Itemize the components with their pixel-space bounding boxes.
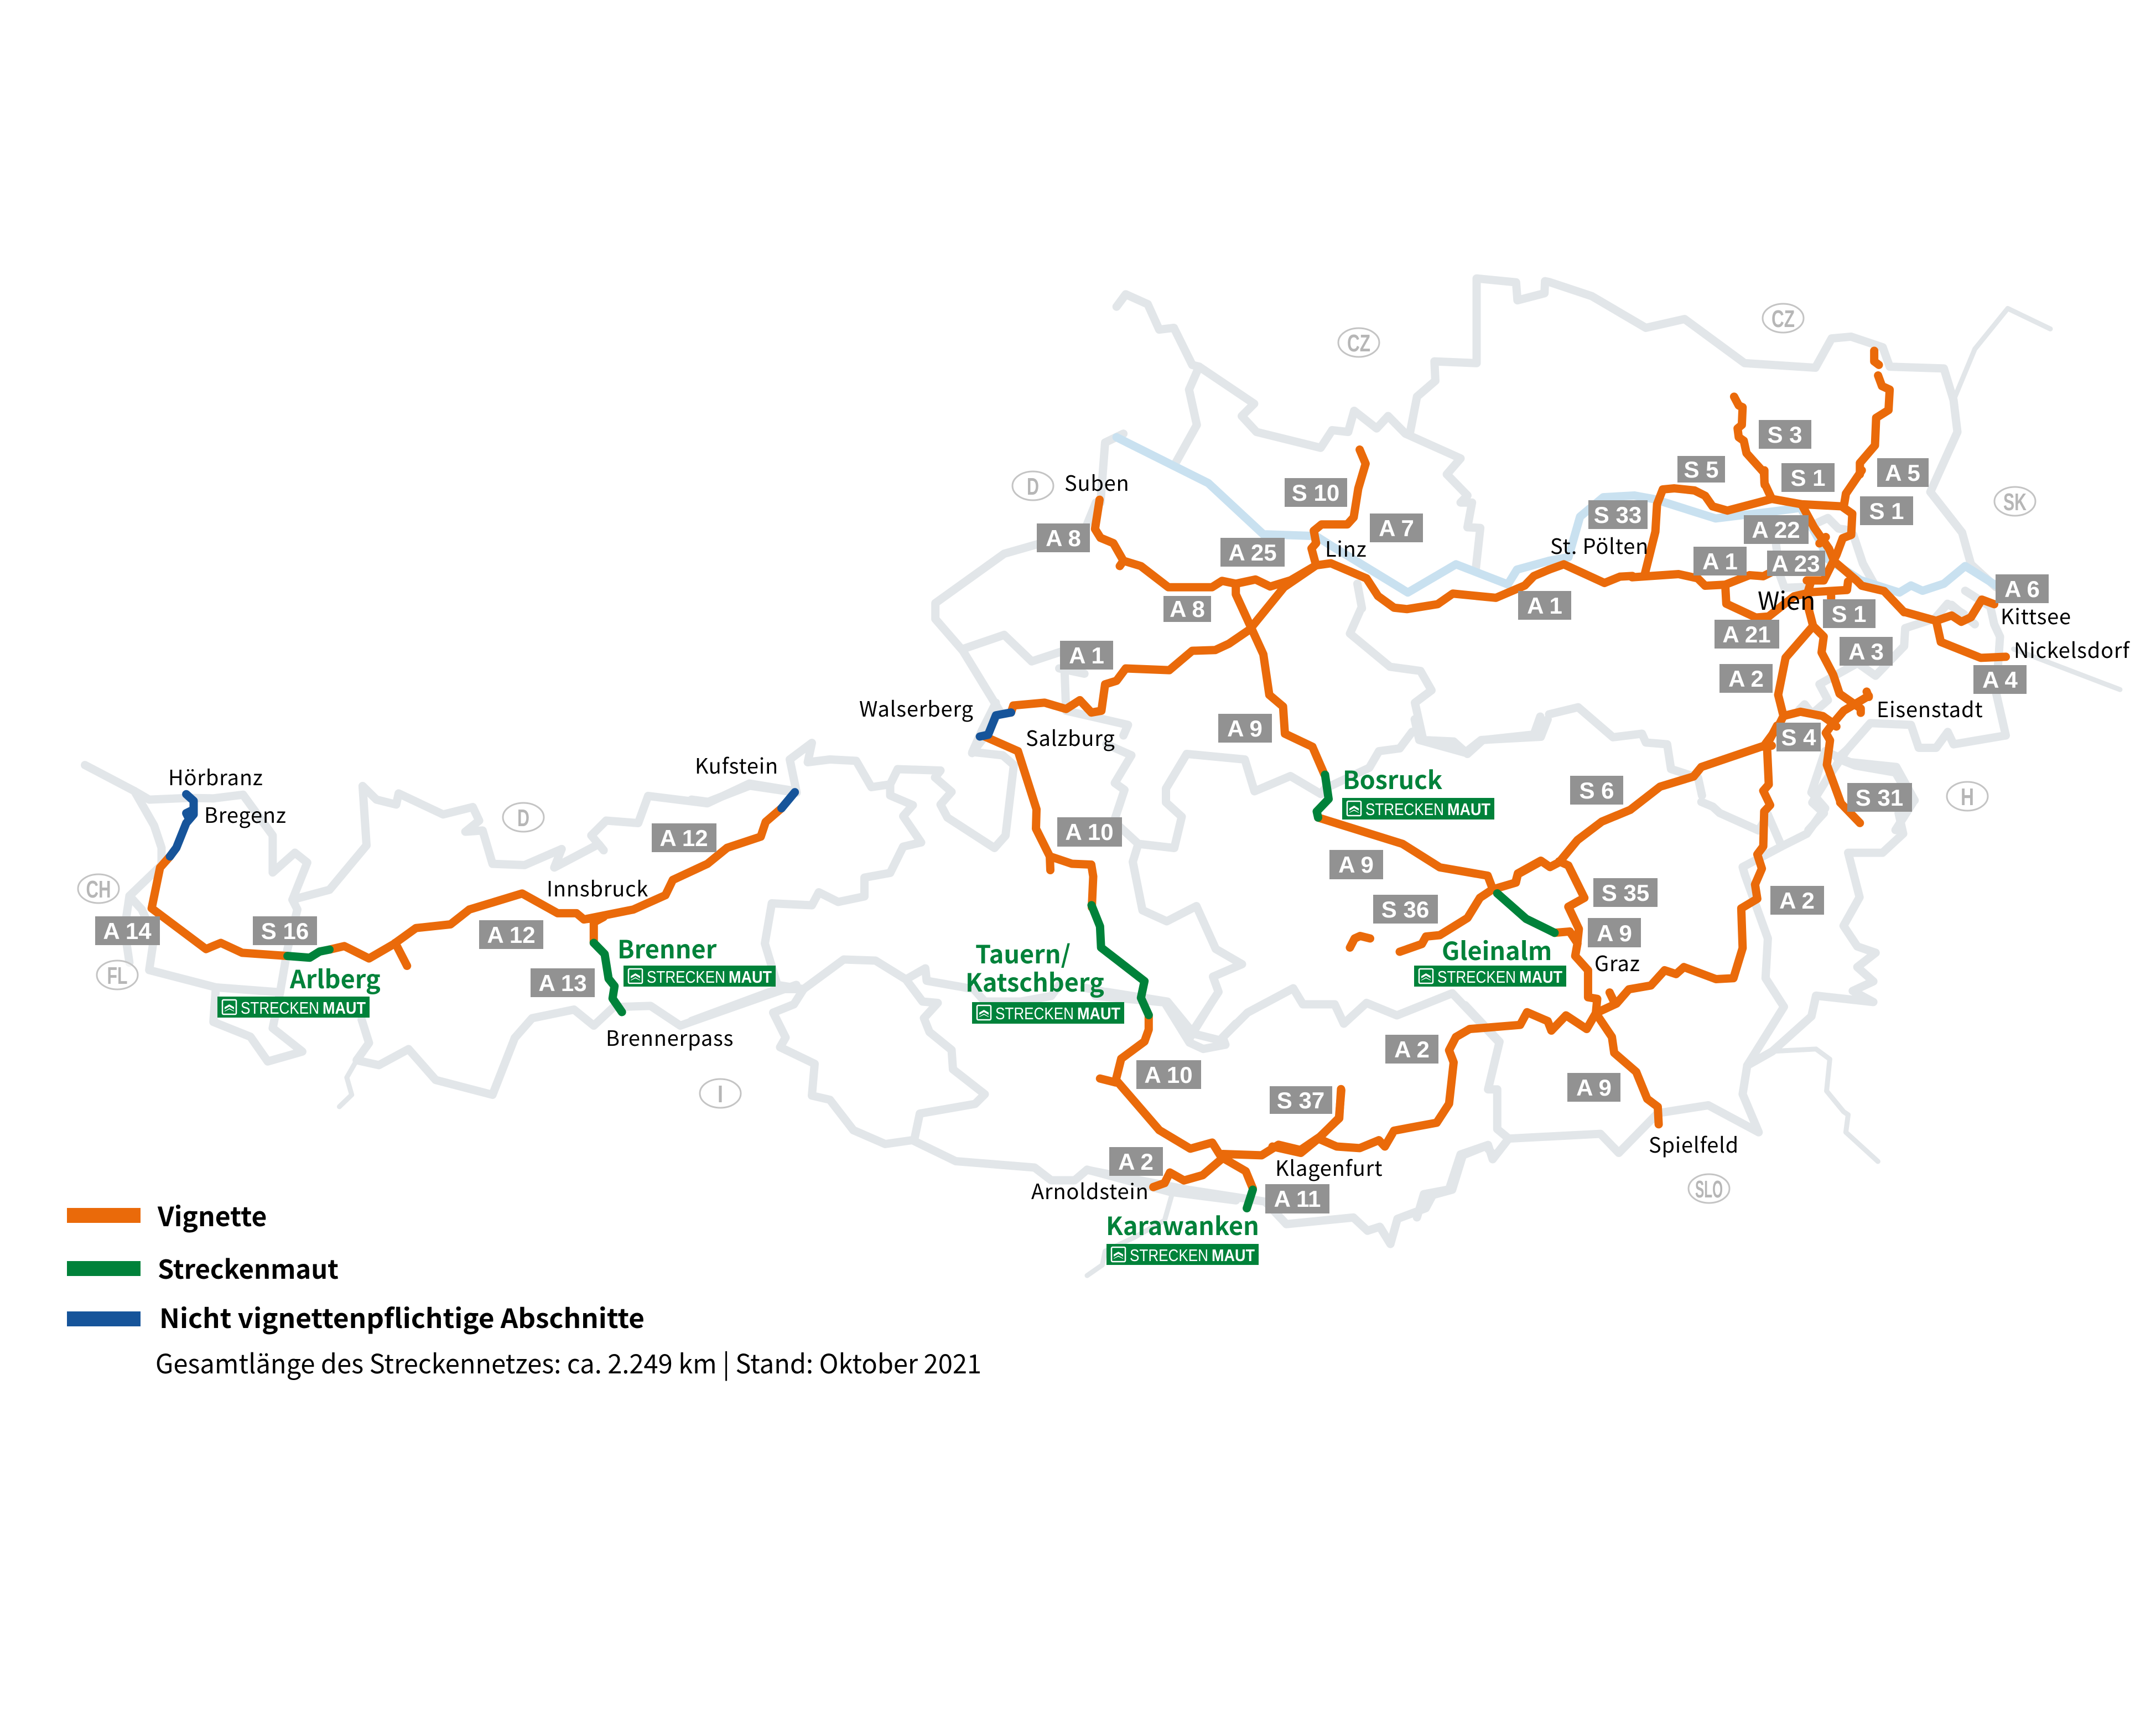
label S 36 xyxy=(1373,895,1438,924)
label A 1 Wien xyxy=(1693,547,1747,575)
label A 2 Arnoldstein: A 2 xyxy=(1118,1149,1154,1175)
label A 10 south: A 10 xyxy=(1144,1062,1193,1088)
Bosruck road xyxy=(1317,775,1329,818)
label A 12 west: A 12 xyxy=(487,922,536,948)
Vienna network xyxy=(1632,470,1904,802)
label A 9 Gleisdorf xyxy=(1329,850,1383,879)
A14 S16 A12 west xyxy=(152,808,782,966)
green section toll roads xyxy=(288,775,1555,1208)
badge Karawanken: MAUT xyxy=(1212,1246,1255,1265)
marker I: I xyxy=(718,1081,723,1108)
name Brenner: Brenner xyxy=(617,930,717,966)
city Arnoldstein: Arnoldstein xyxy=(1031,1175,1149,1205)
badge Gleinalm xyxy=(1414,966,1566,987)
label A 8 north: A 8 xyxy=(1046,525,1081,551)
badge Arlberg: STRECKEN xyxy=(241,998,319,1018)
label S 1 south xyxy=(1823,599,1876,628)
Walserberg section xyxy=(980,713,1011,736)
label S 6: S 6 xyxy=(1579,777,1614,803)
legend Streckenmaut: Streckenmaut xyxy=(158,1248,339,1287)
label A 5 xyxy=(1877,458,1929,487)
label S 35 xyxy=(1593,878,1658,907)
label A 4 xyxy=(1973,665,2027,694)
legend nicht vignettenpflichtig: Nicht vignettenpflichtige Abschnitte xyxy=(159,1297,645,1336)
total length note: Gesamtlänge des Streckennetzes: ca. 2.249 km | Stand: Oktober 2021 xyxy=(155,1342,981,1381)
label A 14 xyxy=(95,916,160,945)
city Kufstein: Kufstein xyxy=(695,749,778,780)
label A 12 west xyxy=(479,920,543,949)
name Tauern Katschberg: Tauern/ xyxy=(975,935,1071,971)
badge Gleinalm: STRECKEN xyxy=(1437,967,1516,987)
badge Tauern Katschberg: MAUT xyxy=(1077,1004,1120,1023)
label A 2 east xyxy=(1770,886,1824,915)
city Linz: Linz xyxy=(1325,532,1367,563)
marker SK: SK xyxy=(2003,489,2027,516)
label A 8 south: A 8 xyxy=(1170,596,1205,622)
label A 1 centre: A 1 xyxy=(1527,593,1562,619)
label A 1 Salzburg: A 1 xyxy=(1069,642,1104,668)
name Tauern Katschberg xyxy=(965,935,1104,999)
label A 1 Salzburg xyxy=(1060,641,1113,670)
marker H xyxy=(1947,782,1988,811)
label A 23: A 23 xyxy=(1771,551,1820,577)
label A 11 xyxy=(1265,1184,1329,1213)
blue non-vignette sections xyxy=(170,713,1011,857)
badge Karawanken: STRECKEN xyxy=(1130,1246,1208,1265)
label A 1 Wien: A 1 xyxy=(1702,548,1738,574)
name Bosruck: Bosruck xyxy=(1343,760,1442,796)
label A 2 Arnoldstein xyxy=(1109,1147,1163,1176)
label S 6 xyxy=(1570,776,1623,805)
Karawanken road xyxy=(1247,1190,1253,1208)
label S 33: S 33 xyxy=(1594,502,1641,528)
city Klagenfurt: Klagenfurt xyxy=(1275,1152,1383,1182)
city Suben: Suben xyxy=(1064,466,1129,497)
label A 6 xyxy=(1996,574,2049,603)
badge Arlberg xyxy=(217,997,370,1018)
label S 3: S 3 xyxy=(1767,422,1802,448)
marker D east xyxy=(1012,471,1053,500)
label A 9 Pyhrn xyxy=(1218,714,1272,743)
label S 1 east xyxy=(1860,496,1913,525)
badge Gleinalm: MAUT xyxy=(1519,967,1562,987)
A10 Tauern north xyxy=(984,736,1093,907)
city Graz: Graz xyxy=(1594,947,1640,977)
S6 A2 A9 Styria xyxy=(1272,725,1777,1153)
label S 31: S 31 xyxy=(1856,785,1903,811)
badge Karawanken xyxy=(1106,1244,1259,1265)
marker I xyxy=(700,1079,741,1108)
toll section names xyxy=(289,760,1552,1242)
label A 9 Gleisdorf: A 9 xyxy=(1338,852,1374,878)
marker SLO: SLO xyxy=(1695,1176,1723,1203)
label A 10 north: A 10 xyxy=(1065,819,1114,845)
label A 10 south xyxy=(1136,1060,1201,1089)
legend Streckenmaut xyxy=(67,1248,339,1287)
city Spielfeld: Spielfeld xyxy=(1649,1128,1739,1159)
label A 1 centre xyxy=(1518,591,1571,620)
badge Bosruck: STRECKEN xyxy=(1365,800,1444,819)
label A 3 xyxy=(1840,637,1893,666)
name Arlberg: Arlberg xyxy=(289,959,381,995)
Kufstein section xyxy=(782,792,795,808)
label A 7: A 7 xyxy=(1379,515,1414,541)
label S 1 east: S 1 xyxy=(1869,498,1904,524)
city Walserberg: Walserberg xyxy=(859,692,974,723)
badge Bosruck: MAUT xyxy=(1447,800,1490,819)
label A 9 Pyhrn: A 9 xyxy=(1227,715,1263,741)
city Innsbruck: Innsbruck xyxy=(547,872,648,903)
legend Vignette xyxy=(67,1195,267,1234)
label A 21 xyxy=(1715,620,1779,649)
label A 25: A 25 xyxy=(1228,540,1277,566)
road number labels xyxy=(95,420,2049,1213)
label S 1 south: S 1 xyxy=(1831,601,1867,627)
Brenner road xyxy=(594,943,622,1012)
legend xyxy=(67,1195,981,1381)
A10 south and A2 Carinthia xyxy=(1100,1015,1341,1189)
badge Tauern Katschberg xyxy=(972,1002,1124,1024)
label S 1 north xyxy=(1781,463,1835,492)
label A 22: A 22 xyxy=(1752,517,1800,543)
label A 21: A 21 xyxy=(1722,621,1771,647)
label S 16 xyxy=(253,916,317,945)
badge Brenner: STRECKEN xyxy=(647,967,725,987)
badge Tauern Katschberg: STRECKEN xyxy=(995,1004,1074,1023)
label A 22 xyxy=(1744,515,1809,544)
city Wien: Wien xyxy=(1758,581,1815,617)
city St. Pölten: St. Pölten xyxy=(1550,530,1649,560)
label A 13: A 13 xyxy=(538,970,587,996)
marker D west xyxy=(503,803,544,832)
label A 14: A 14 xyxy=(103,918,152,944)
city Salzburg: Salzburg xyxy=(1026,722,1115,752)
marker D east: D xyxy=(1027,473,1039,500)
label A 11: A 11 xyxy=(1274,1186,1321,1212)
label S 10: S 10 xyxy=(1292,480,1339,506)
label S 31 xyxy=(1847,783,1912,812)
label A 9 Graz: A 9 xyxy=(1597,920,1632,946)
label A 2 Wien: A 2 xyxy=(1728,666,1764,692)
label A 25 xyxy=(1220,538,1285,567)
label A 5: A 5 xyxy=(1885,460,1920,486)
city Kittsee: Kittsee xyxy=(2001,600,2071,630)
marker FL: FL xyxy=(107,962,127,989)
badge Brenner xyxy=(624,966,776,987)
label S 1 north: S 1 xyxy=(1790,465,1826,491)
label A 9 Graz xyxy=(1588,918,1641,947)
river Danube xyxy=(1116,437,1996,593)
A9 central and S36 S6 xyxy=(1318,818,1540,952)
label A 2 east: A 2 xyxy=(1779,888,1815,914)
label A 8 north xyxy=(1037,523,1090,552)
marker D west: D xyxy=(517,805,529,832)
label A 12 east xyxy=(652,823,716,852)
label A 12 east: A 12 xyxy=(659,825,708,851)
orange vignette motorways xyxy=(152,351,2006,1189)
legend Vignette: Vignette xyxy=(157,1195,267,1234)
label S 37: S 37 xyxy=(1277,1087,1324,1113)
Hörbranz Bregenz section xyxy=(170,794,194,857)
label S 10 xyxy=(1285,478,1347,507)
label A 2 Wien xyxy=(1719,664,1773,693)
badge Bosruck xyxy=(1342,798,1494,819)
marker CZ west: CZ xyxy=(1347,330,1370,357)
badge Brenner: MAUT xyxy=(729,967,772,987)
label S 36: S 36 xyxy=(1381,896,1429,922)
name Karawanken: Karawanken xyxy=(1106,1206,1259,1242)
label A 4: A 4 xyxy=(1982,667,2018,693)
Gleinalm road xyxy=(1497,894,1555,933)
name Gleinalm: Gleinalm xyxy=(1442,931,1552,967)
city Eisenstadt: Eisenstadt xyxy=(1877,693,1983,723)
Bregenz spur xyxy=(186,810,194,818)
city Brennerpass: Brennerpass xyxy=(606,1021,734,1052)
marker CH: CH xyxy=(86,876,111,903)
label A 2 south xyxy=(1385,1035,1438,1064)
city names xyxy=(168,466,2130,1205)
label S 16: S 16 xyxy=(261,918,309,944)
marker FL xyxy=(97,961,138,989)
A1 S3 A5 A6 A4 east xyxy=(1549,351,2006,823)
label S 35: S 35 xyxy=(1602,880,1649,906)
label A 10 north xyxy=(1057,817,1122,847)
A8 A1 A25 A7 S10 north xyxy=(1011,450,1549,774)
badge Arlberg: MAUT xyxy=(323,998,366,1018)
country markers xyxy=(78,304,2035,1203)
label A 9 Spielfeld: A 9 xyxy=(1576,1075,1612,1101)
marker H: H xyxy=(1961,784,1974,811)
label A 9 Spielfeld xyxy=(1567,1073,1620,1102)
label A 3: A 3 xyxy=(1848,639,1884,665)
label S 3 xyxy=(1759,420,1811,449)
label A 6: A 6 xyxy=(2004,576,2040,602)
label S 5: S 5 xyxy=(1684,457,1719,483)
label A 2 south: A 2 xyxy=(1394,1036,1430,1062)
city Bregenz: Bregenz xyxy=(204,798,287,829)
city Nickelsdorf: Nickelsdorf xyxy=(2014,634,2130,664)
label A 7 xyxy=(1370,514,1423,542)
name Tauern Katschberg: Katschberg xyxy=(965,963,1104,999)
Arlberg road xyxy=(288,950,330,958)
Tauern Katschberg road xyxy=(1092,905,1149,1015)
marker SLO xyxy=(1689,1174,1729,1203)
Streckenmaut badges xyxy=(217,798,1566,1265)
label S 4: S 4 xyxy=(1781,724,1816,750)
label A 13 xyxy=(531,968,595,997)
marker CZ east: CZ xyxy=(1771,305,1795,333)
city Hörbranz: Hörbranz xyxy=(168,761,263,791)
country borders xyxy=(85,278,2120,1275)
